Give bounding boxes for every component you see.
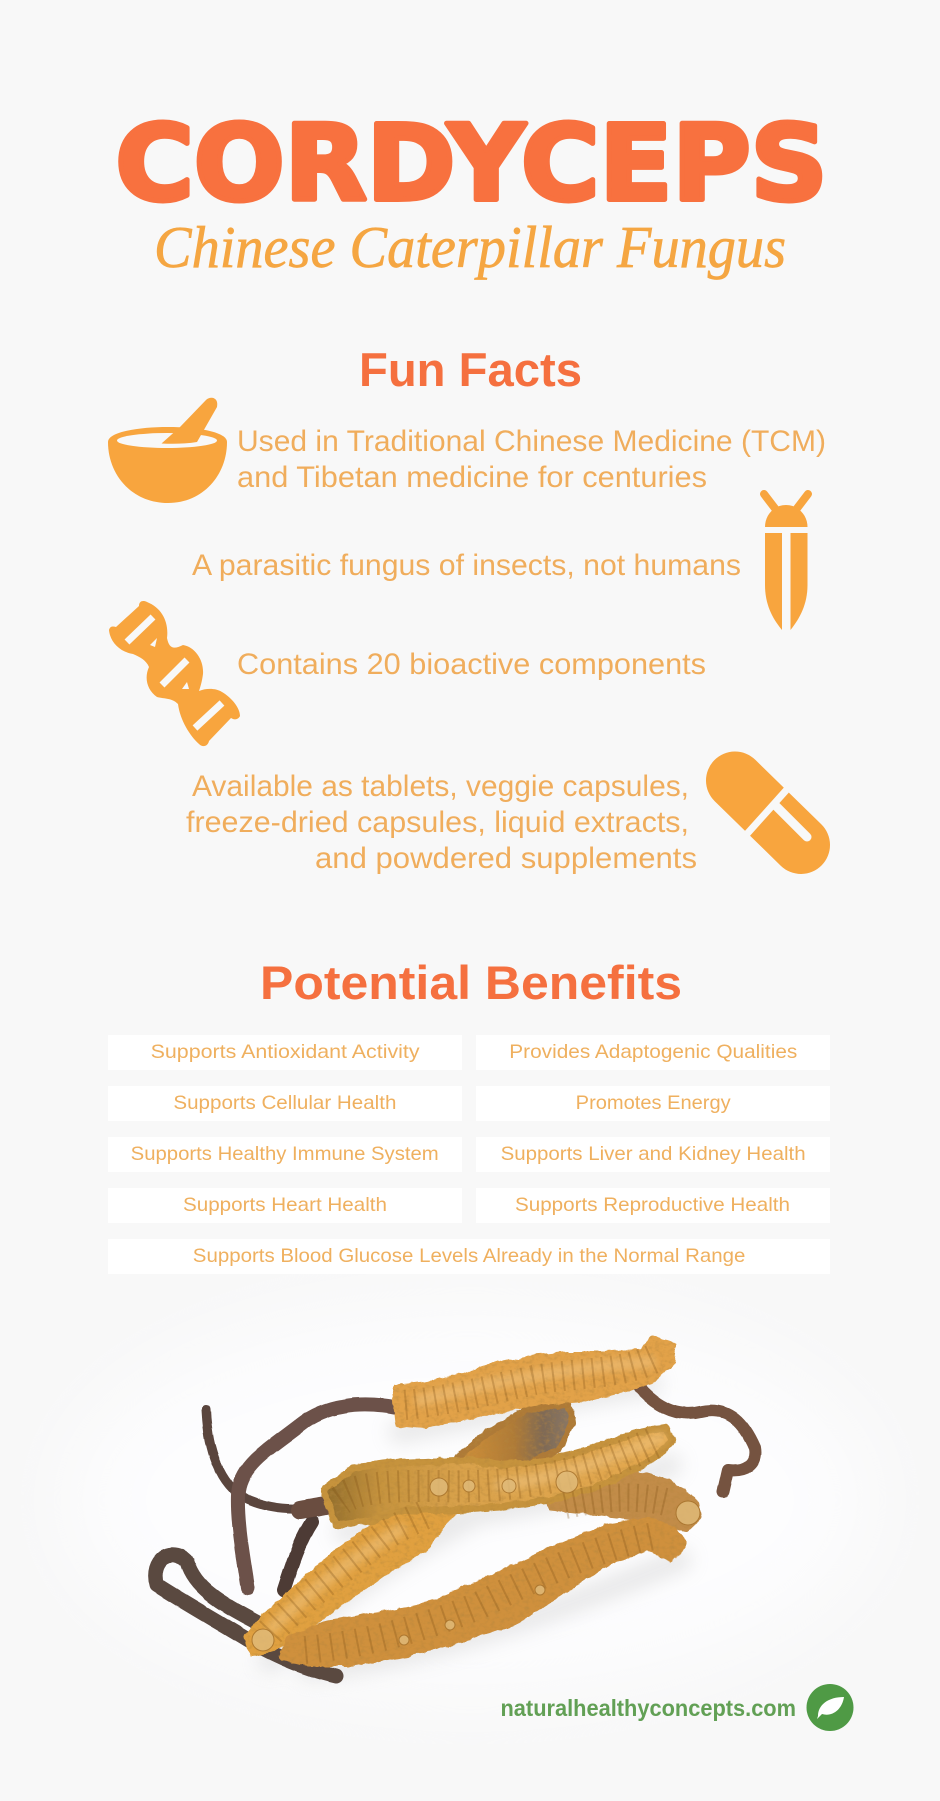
benefit: liver and kidney — [476, 1137, 830, 1172]
benefit: blood glucose: Supports Blood Glucose Levels Already in the Normal Range — [193, 1245, 745, 1267]
benefit: cellular health — [108, 1086, 462, 1121]
heading: fun facts: Fun Facts — [359, 343, 582, 396]
fact: parasitic fungus: A parasitic fungus of insects, not humans — [192, 549, 741, 582]
photo: dried cordyceps — [156, 1340, 755, 1676]
fact: bioactive components: Contains 20 bioactive components — [237, 648, 706, 681]
icon: insect — [764, 494, 808, 630]
icon: mortar and pestle — [108, 398, 227, 503]
benefit: antioxidant — [108, 1035, 462, 1070]
benefit: immune system — [108, 1137, 462, 1172]
benefit: reproductive health: Supports Reproductive Health — [515, 1194, 790, 1216]
fact: available forms: Available as tablets, veggie capsules, — [192, 770, 689, 803]
benefit: immune system: Supports Healthy Immune System — [131, 1143, 439, 1165]
benefit: energy: Promotes Energy — [576, 1092, 731, 1114]
benefit: adaptogenic — [476, 1035, 830, 1070]
benefit: energy — [476, 1086, 830, 1121]
photo detail: pale body nodules — [252, 1471, 700, 1651]
benefit: heart health: Supports Heart Health — [183, 1194, 387, 1216]
panel: fun facts — [108, 343, 826, 875]
fact: available forms: freeze-dried capsules, liquid extracts, — [186, 806, 689, 839]
benefit: heart health — [108, 1188, 462, 1223]
benefit: reproductive health — [476, 1188, 830, 1223]
photo detail: body segment rings — [270, 1358, 670, 1650]
title: CORDYCEPS — [116, 102, 828, 224]
photo detail: body highlights — [272, 1362, 660, 1628]
heading: potential benefits: Potential Benefits — [260, 956, 682, 1009]
logo: leaf badge — [806, 1684, 854, 1731]
fact: traditional medicine: and Tibetan medicine for centuries — [237, 461, 707, 494]
fact: traditional medicine — [237, 425, 826, 494]
icon: capsule — [735, 780, 807, 845]
benefit: liver and kidney: Supports Liver and Kidney Health — [501, 1143, 806, 1165]
icon: dna helix — [109, 601, 240, 746]
benefit: blood glucose — [108, 1239, 830, 1274]
panel: potential benefits — [108, 956, 830, 1274]
footer: website url: naturalhealthyconcepts.com — [500, 1695, 796, 1721]
fact: traditional medicine: Used in Traditional Chinese Medicine (TCM) — [237, 425, 826, 458]
subtitle: Chinese Caterpillar Fungus — [154, 214, 786, 280]
fact: available forms: and powdered supplements — [315, 842, 697, 875]
benefit: antioxidant: Supports Antioxidant Activity — [151, 1041, 420, 1063]
benefit: adaptogenic: Provides Adaptogenic Qualities — [509, 1041, 798, 1063]
benefit: cellular health: Supports Cellular Health — [173, 1092, 396, 1114]
fact: available forms — [186, 770, 697, 875]
